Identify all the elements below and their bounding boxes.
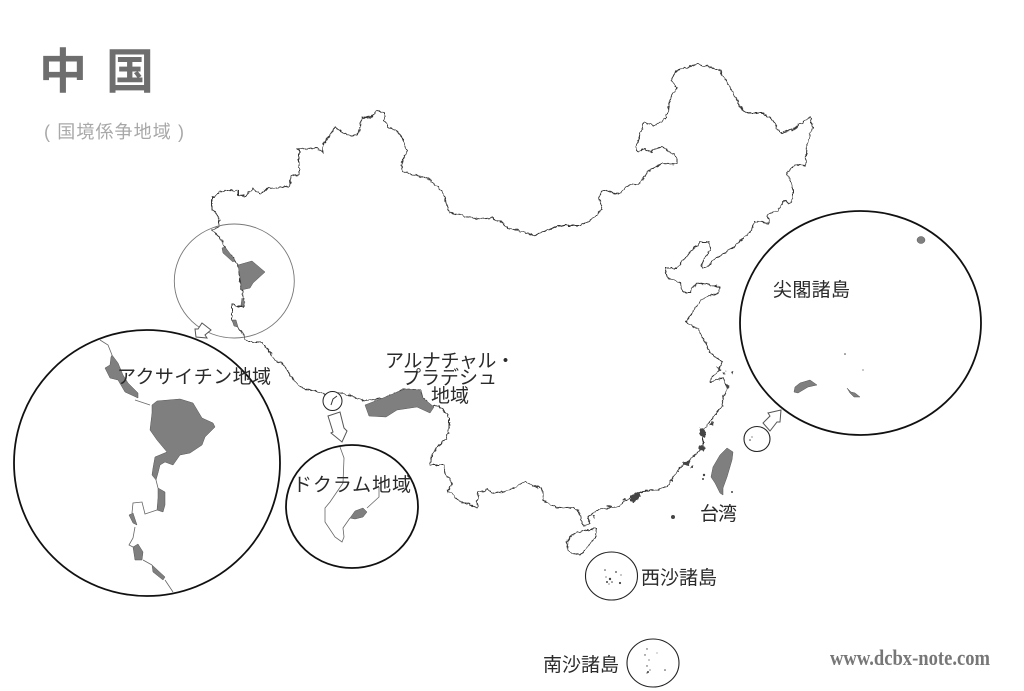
label: Taiwan: 台湾 xyxy=(700,503,737,525)
label: Arunachal Pradesh: プラデシュ xyxy=(402,367,497,389)
region: Arunachal Pradesh xyxy=(365,389,434,417)
label: Arunachal Pradesh xyxy=(385,351,515,407)
region: Aksai Chin on main map xyxy=(222,247,265,327)
label: Nansha Islands: 南沙諸島 xyxy=(543,654,619,676)
label: Arunachal Pradesh: 地域 xyxy=(431,385,469,407)
arrow: Aksai Chin xyxy=(195,323,211,338)
label: Arunachal Pradesh: アルナチャル・ xyxy=(385,351,515,372)
label: Senkaku Islands: 尖閣諸島 xyxy=(773,279,850,301)
small islands near Taiwan xyxy=(671,474,733,519)
circle: Doklam marker xyxy=(323,392,342,410)
circle: Xisha xyxy=(586,552,638,600)
subtitle: ( 国境係争地域 ) xyxy=(44,122,184,142)
arrow: Senkaku xyxy=(763,410,781,431)
circle: Aksai Chin inset xyxy=(14,330,280,596)
circle: main Aksai Chin marker xyxy=(174,224,294,338)
map: Hainan xyxy=(567,528,597,555)
label: Xisha Islands: 西沙諸島 xyxy=(641,567,717,589)
circle: Doklam inset xyxy=(286,445,418,568)
region: Taiwan xyxy=(711,448,733,495)
website credit: www.dcbx-note.com xyxy=(830,645,990,670)
map: China outline xyxy=(212,64,813,555)
title: 中国 xyxy=(39,32,154,102)
circle: Senkaku inset xyxy=(740,211,981,435)
label: Aksai Chin: アクサイチン地域 xyxy=(117,366,271,388)
label: Doklam: ドクラム地域 xyxy=(293,474,411,496)
arrow: Doklam xyxy=(328,412,347,442)
coastal islands xyxy=(592,366,733,519)
circle: Nansha xyxy=(627,639,679,687)
circle: Taiwan-side Senkaku marker xyxy=(744,426,770,452)
